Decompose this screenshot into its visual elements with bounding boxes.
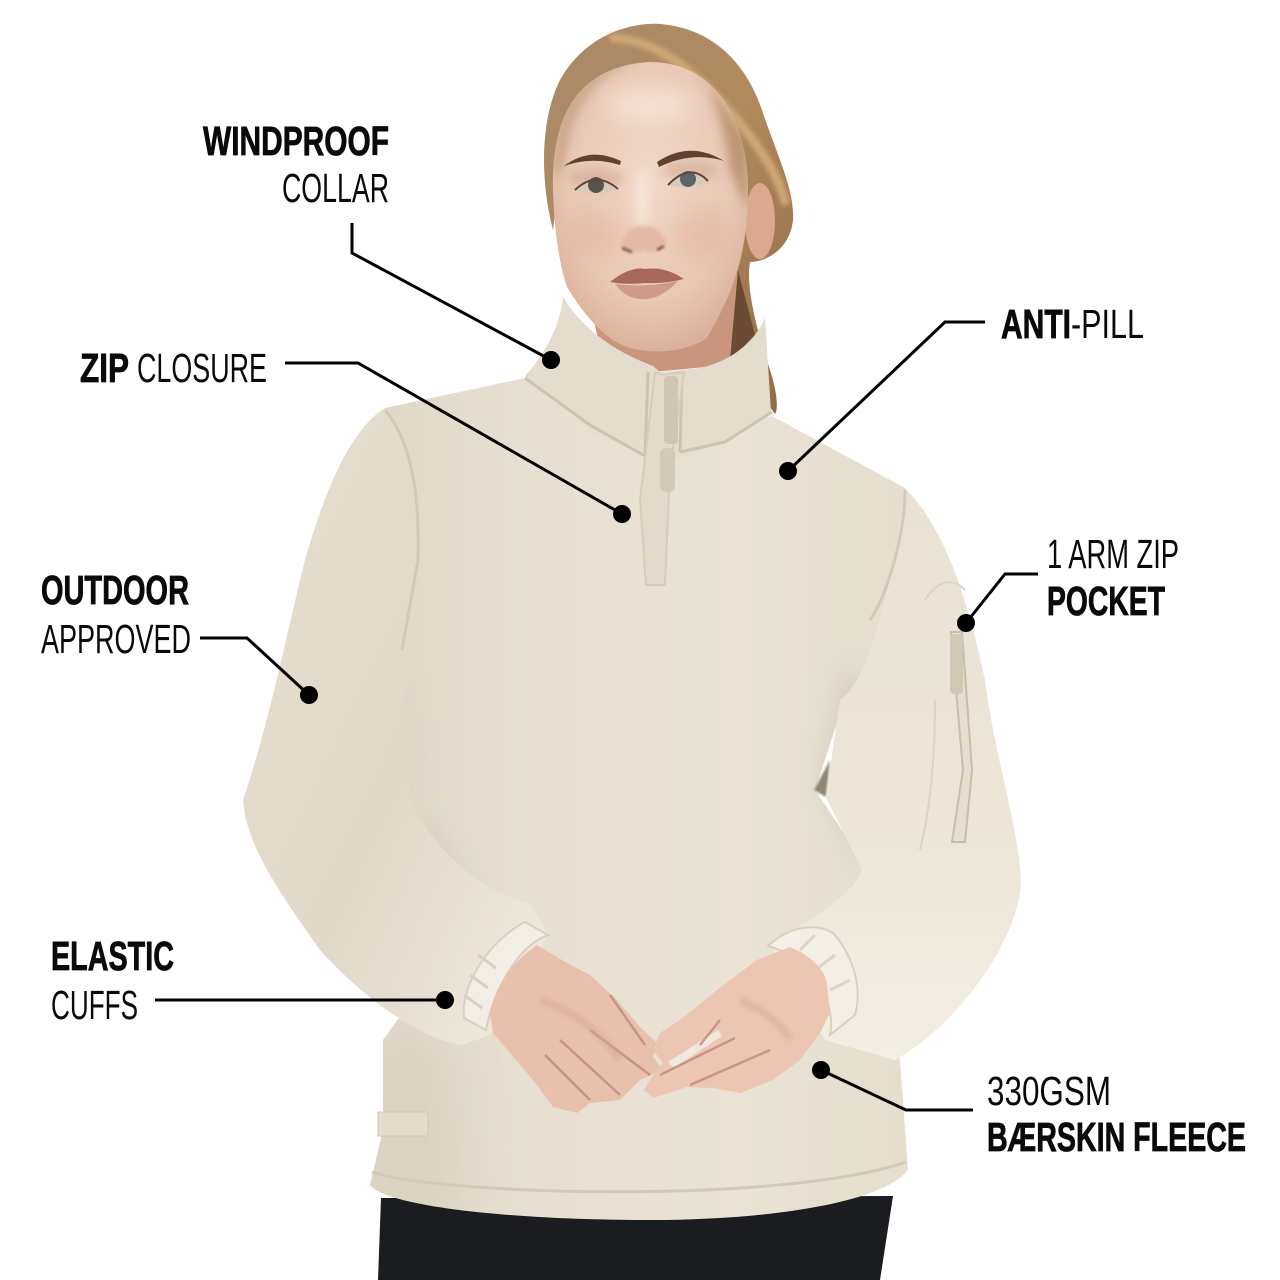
zip teeth and pull xyxy=(660,376,678,492)
label: arm zip pocket: POCKET xyxy=(1047,578,1165,624)
nose xyxy=(620,226,667,253)
cuff right xyxy=(768,927,858,1035)
label: outdoor approved: OUTDOOR xyxy=(41,567,189,613)
leggings xyxy=(378,1196,893,1280)
dot: elastic cuffs xyxy=(436,991,454,1009)
torso xyxy=(370,378,908,1220)
hand right xyxy=(644,947,830,1098)
label: outdoor approved: APPROVED xyxy=(41,616,191,662)
face shading xyxy=(553,60,748,261)
line: arm pocket xyxy=(966,574,1038,623)
dark hair behind neck xyxy=(730,270,755,360)
label: windproof collar: COLLAR xyxy=(282,165,389,211)
line: windproof collar xyxy=(352,223,551,360)
callout lines and dots xyxy=(155,223,1038,1110)
sleeve left xyxy=(243,408,548,1045)
dot: zip closure xyxy=(613,505,631,523)
dot: anti-pill xyxy=(779,462,797,480)
cuff left xyxy=(464,922,548,1030)
line: fleece xyxy=(821,1070,973,1110)
lips xyxy=(610,268,684,299)
label: zip closure: CLOSURE xyxy=(137,345,267,391)
label: elastic cuffs xyxy=(51,933,174,1028)
label: zip closure: ZIP xyxy=(80,345,129,391)
dot: windproof collar xyxy=(542,351,560,369)
label: anti-pill: -PILL xyxy=(1071,301,1144,347)
dot: fleece xyxy=(812,1061,830,1079)
label: 330gsm baerskin fleece xyxy=(987,1068,1246,1160)
torso shading xyxy=(370,650,875,1220)
finger gap xyxy=(668,1030,722,1068)
neck xyxy=(590,260,745,372)
label: elastic cuffs: CUFFS xyxy=(51,982,138,1028)
line: outdoor approved xyxy=(200,638,309,695)
logo patch xyxy=(378,1112,428,1136)
eyes xyxy=(575,171,708,193)
hand shading xyxy=(540,1000,790,1060)
arm pocket zip xyxy=(920,582,972,850)
head xyxy=(553,62,748,352)
hair xyxy=(544,24,793,414)
line: anti-pill xyxy=(788,322,985,471)
hem xyxy=(372,1162,906,1192)
finger lines xyxy=(545,995,770,1100)
dot: outdoor approved xyxy=(300,686,318,704)
label: outdoor approved xyxy=(41,567,191,662)
label: anti-pill xyxy=(1001,301,1144,347)
label: arm zip pocket: 1 ARM ZIP xyxy=(1047,531,1179,577)
label: arm zip pocket xyxy=(1047,531,1179,624)
dot: arm pocket xyxy=(957,614,975,632)
ear xyxy=(745,183,775,259)
sleeve right xyxy=(770,488,1021,1060)
line: elastic cuffs xyxy=(155,998,445,1002)
label: windproof collar xyxy=(203,118,389,211)
dark gap beside right sleeve xyxy=(814,760,830,797)
label: 330gsm baerskin fleece: 330GSM xyxy=(987,1068,1111,1114)
label: zip closure xyxy=(80,345,267,391)
line: zip closure xyxy=(285,363,622,514)
label: anti-pill: ANTI xyxy=(1001,301,1071,347)
hand left xyxy=(490,945,663,1113)
label: windproof collar: WINDPROOF xyxy=(203,118,389,164)
zip placket xyxy=(640,372,684,585)
sleeve seams xyxy=(385,410,905,650)
collar xyxy=(525,297,771,458)
illustration: woman wearing fleece pullover xyxy=(243,24,1021,1280)
label: elastic cuffs: ELASTIC xyxy=(51,933,174,979)
hair highlight xyxy=(610,38,786,205)
eyebrows xyxy=(564,151,724,167)
